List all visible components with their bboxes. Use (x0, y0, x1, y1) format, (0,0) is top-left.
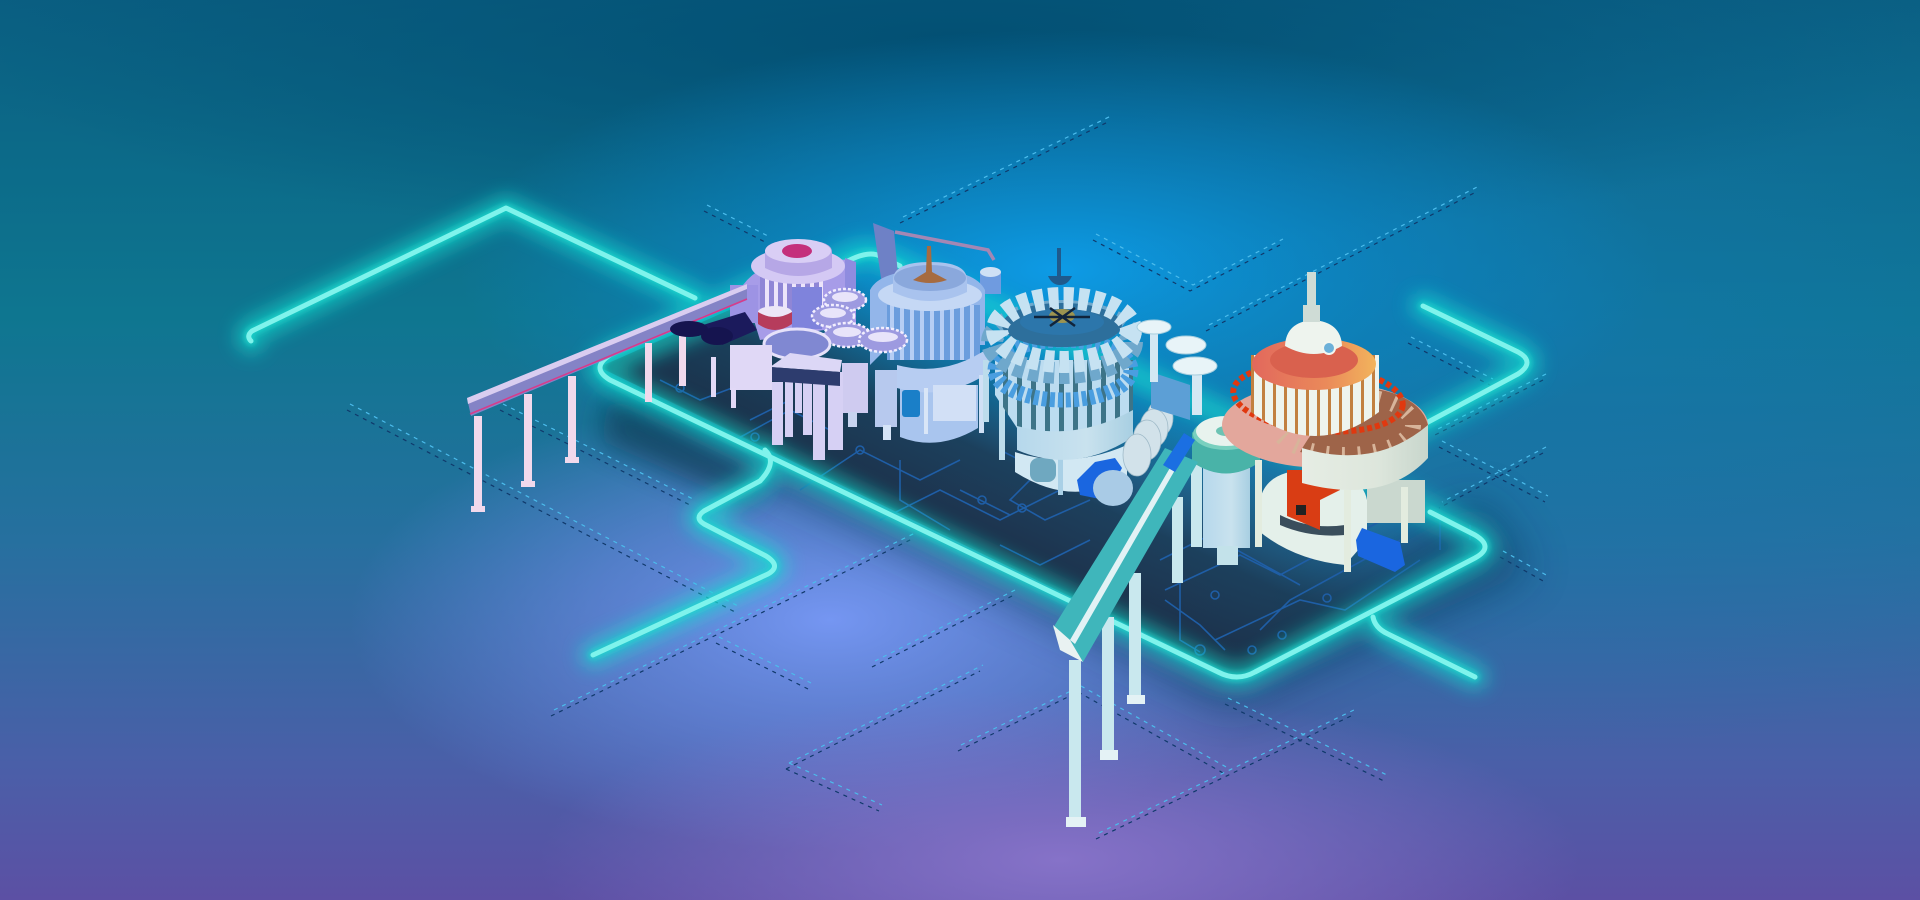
machine 2: blue rotary unit (870, 223, 1001, 443)
left conveyor with legs (467, 284, 747, 512)
central hub (1049, 309, 1075, 323)
big disc (1222, 382, 1428, 468)
dashed guide lines (347, 116, 1548, 839)
bottle star ring (997, 298, 1131, 362)
machine 3: bottle carousel (983, 248, 1133, 495)
machine 5: orange rotary unit (1222, 272, 1428, 572)
pillar discs with blue panels (1137, 320, 1217, 420)
dome (1285, 320, 1342, 354)
magenta hub (782, 244, 812, 258)
dark circuit platform (599, 253, 1487, 678)
neon outline glow (249, 208, 1527, 677)
blue rollers (1163, 433, 1195, 472)
labeller dark discs and red tank (670, 306, 792, 345)
base (1260, 470, 1367, 565)
machine 4: teal capper (1192, 416, 1260, 565)
spire (1048, 248, 1072, 285)
carousel base (1015, 445, 1127, 492)
orange ring (1252, 338, 1376, 390)
red drive (1287, 470, 1340, 530)
right box (1367, 480, 1425, 523)
platform drop shadow (600, 360, 1530, 705)
blue motor (1077, 458, 1122, 500)
filler table with legs (764, 329, 843, 460)
pressure tanks and motor (1077, 400, 1173, 506)
front band (897, 347, 990, 392)
circuit board traces (660, 380, 1470, 655)
lower labeller body (711, 345, 772, 408)
column cylinder (1251, 355, 1379, 436)
chimney and pipe (873, 223, 1001, 294)
small tower (875, 370, 897, 427)
blue motor (1356, 528, 1405, 572)
spire (1303, 272, 1320, 322)
right conveyor legs (1066, 463, 1202, 827)
right conveyor belt (1053, 433, 1198, 662)
machine 1: lilac rotary unit (730, 239, 856, 340)
wire discs and cabinet (812, 289, 907, 427)
outer band (1302, 425, 1428, 490)
red dot ring (1230, 358, 1406, 438)
spire (913, 246, 947, 283)
